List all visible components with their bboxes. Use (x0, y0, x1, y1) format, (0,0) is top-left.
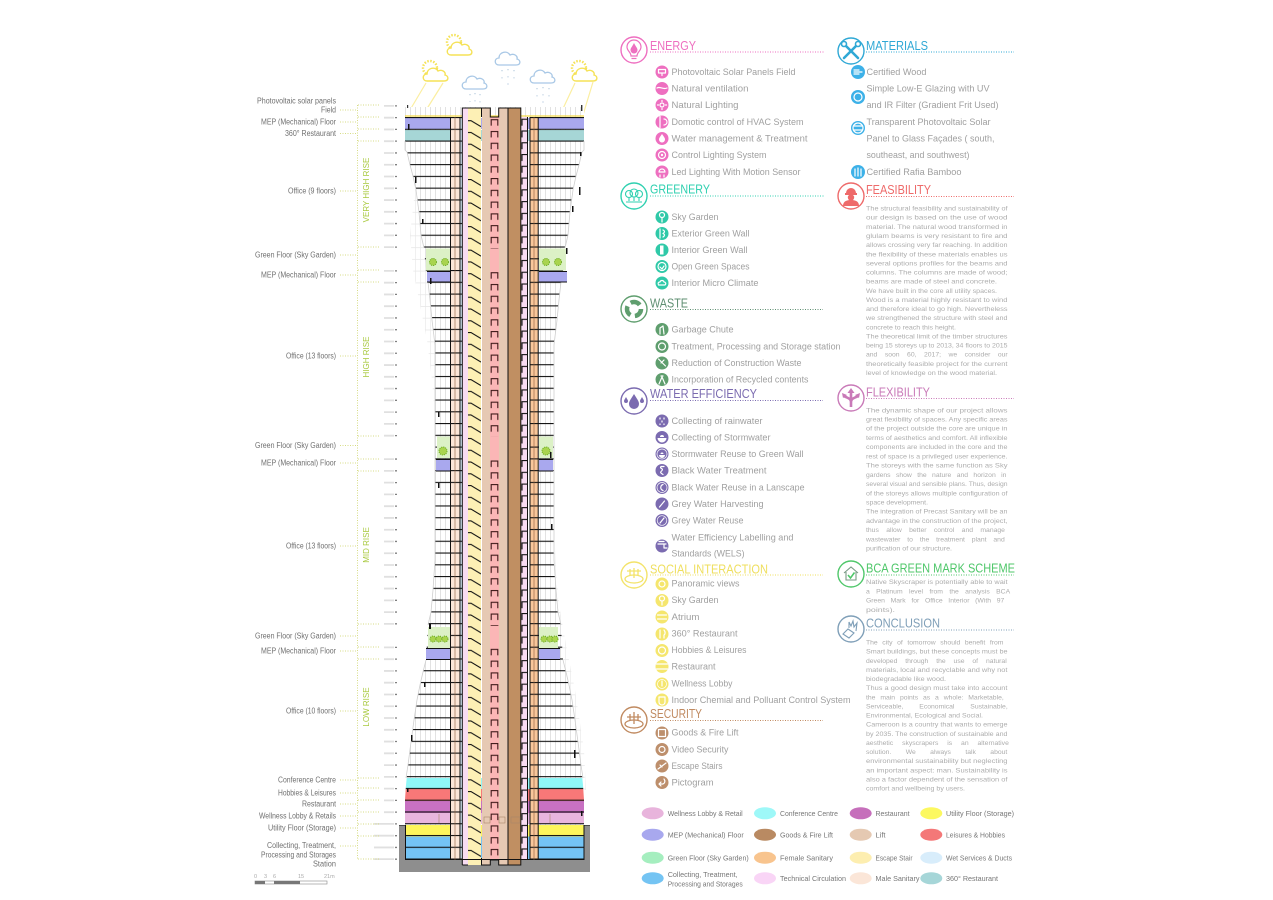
heading: greenery: GREENERY (650, 182, 711, 196)
text: flexibility paragraph: components are included in the core and the (866, 444, 1008, 451)
item: sky garden: Sky Garden (672, 212, 718, 222)
item: black water reuse (656, 481, 804, 494)
core outlines (406, 108, 584, 865)
item: goods and fire lift (656, 726, 739, 740)
item: panoramic views (656, 578, 740, 590)
text: flexibility paragraph: The dynamic shape of our project allows (866, 407, 1008, 414)
text: height zones: VERY HIGH RISE (362, 158, 371, 222)
text: feasibility paragraph: level of knowledge on the wood material. (866, 370, 997, 377)
legend: technical circulation (754, 872, 846, 884)
legend: MEP floor (642, 829, 744, 841)
text: conclusion paragraph: Cameroon is a country that wants to emerge (866, 722, 1008, 729)
legend: wellness lobby and retail: Wellness Lobby & Retail (668, 809, 743, 818)
icon: sun and cloud top (447, 35, 472, 55)
text: feasibility paragraph: allows crossing very far reaching. In addition (866, 242, 1008, 249)
text: flexibility paragraph: The integration of Precast Sanitary will be an (866, 509, 1008, 516)
legend: escape stair: Escape Stair (876, 853, 913, 862)
scale bar: 15 (298, 874, 304, 880)
item: low-e glazing: and IR Filter (Gradient Frit Used) (866, 100, 998, 110)
panel: greenery (621, 182, 824, 290)
item: rafia bamboo: Certified Rafia Bamboo (866, 167, 962, 177)
icon: sun rays left (407, 83, 443, 115)
text: feasibility paragraph: The structural feasibility and sustainability of (866, 206, 1008, 213)
item: stormwater reuse (656, 448, 804, 460)
item: grey water harvesting: Grey Water Harvesting (672, 499, 764, 509)
item: sky garden social (656, 594, 718, 607)
heading: water efficiency: WATER EFFICIENCY (650, 387, 758, 401)
text: conclusion paragraph: solution. We always talk about (866, 749, 1007, 756)
text: flexibility paragraph: several visual and sensible plans. Thus, design (866, 481, 1008, 488)
item: sky garden social: Sky Garden (672, 595, 718, 605)
roof solar field (405, 105, 584, 117)
text: feasibility paragraph: columns. The columns are made of wood; (866, 270, 1008, 276)
chart: building section (399, 105, 590, 872)
panel: energy (621, 37, 824, 178)
item: water efficiency labelling (656, 532, 794, 558)
item: collecting stormwater: Collecting of Stormwater (672, 432, 770, 442)
text: feasibility paragraph (865, 206, 1008, 377)
text: height zones (362, 158, 371, 727)
icon: water drops (621, 388, 647, 414)
item: interior green wall (656, 244, 748, 256)
item: rafia bamboo (851, 165, 962, 179)
text: height zones: LOW RISE (362, 687, 371, 727)
item: black water treatment: Black Water Treatment (672, 466, 767, 476)
legend: green floor (642, 852, 749, 864)
level dotted leaders (340, 105, 380, 859)
text: feasibility paragraph: several options profiles for the beams and (866, 260, 1008, 267)
item: stormwater reuse: Stormwater Reuse to Green Wall (672, 449, 804, 459)
sky gardens (426, 248, 566, 648)
legend: collecting and treatment: Collecting, Treatment, (668, 870, 738, 879)
item: led lighting: Led Lighting With Motion Sensor (672, 167, 800, 177)
item: hobbies and leisures (656, 644, 747, 657)
item: restaurant (656, 660, 716, 673)
text: feasibility paragraph: and soon 60, 2017; we consider our (866, 352, 1008, 359)
icon: rain cloud centre (495, 52, 520, 88)
legend: leisures and hobbies (920, 829, 1005, 841)
icon: sun and cloud right (572, 61, 597, 81)
item: natural ventilation: Natural ventilation (672, 84, 748, 94)
item: reduction of construction waste: Reduction of Construction Waste (672, 358, 802, 368)
text: flexibility paragraph: advantage in the construction of the project, (866, 518, 1008, 525)
item: photovoltaic facades: Panel to Glass Façades ( south, (866, 134, 994, 144)
legend: wet services and ducts: Wet Services & Ducts (946, 853, 1012, 862)
item: collecting rainwater (656, 414, 762, 428)
text: flexibility paragraph: purification of our structure. (866, 546, 952, 553)
text: BCA paragraph: Native Skyscraper is potentially able to wait (866, 579, 1008, 586)
item: collecting rainwater: Collecting of rainwater (672, 416, 762, 426)
item: certified wood: Certified Wood (866, 67, 926, 77)
panel: security (621, 707, 823, 789)
item: photovoltaic facades (851, 117, 994, 160)
icon: sun and cloud left (423, 61, 448, 81)
legend: collecting and treatment (642, 870, 743, 888)
item: photovoltaic facades: southeast, and southwest) (866, 150, 970, 160)
item: indoor chemical control: Indoor Chemial and Polluant Control System (672, 695, 850, 705)
heading: conclusion: CONCLUSION (866, 617, 940, 631)
text: feasibility paragraph: The theoretical limit of the timber structures (866, 333, 1008, 340)
text: conclusion paragraph: Thus a good design must take into account (866, 685, 1008, 692)
text: floor labels: Green Floor (Sky Garden) (255, 632, 336, 640)
text: height zones: HIGH RISE (362, 337, 371, 377)
legend: restaurant: Restaurant (876, 809, 910, 818)
legend: male sanitary (850, 872, 920, 884)
legend: lift (850, 829, 886, 841)
heading: flexibility: FLEXIBILITY (866, 386, 931, 400)
text: floor labels: Field (321, 106, 336, 114)
heading: security: SECURITY (650, 707, 703, 721)
panel: conclusion (838, 616, 1014, 793)
legend: collecting and treatment: Processing and Storages (668, 880, 743, 888)
text: floor labels: Utility Floor (Storage) (268, 824, 336, 832)
item: hobbies and leisures: Hobbies & Leisures (672, 645, 747, 655)
text: floor labels: Collecting, Treatment, (267, 841, 336, 850)
heading: materials: MATERIALS (866, 39, 928, 53)
text: flexibility paragraph: of the project outside the core are unique in (866, 426, 1008, 433)
legend: leisures and hobbies: Leisures & Hobbies (946, 830, 1005, 839)
legend: MEP floor: MEP (Mechanical) Floor (668, 830, 744, 839)
text: conclusion paragraph: aesthetic skyscrapers is an alternative (866, 740, 1009, 747)
item: water efficiency labelling: Water Efficiency Labelling and (672, 532, 794, 542)
legend: 360 restaurant (920, 872, 998, 884)
icon: social figures (621, 562, 647, 588)
sanitary column (490, 117, 499, 860)
item: water efficiency labelling: Standards (WELS) (672, 548, 744, 558)
legend: female sanitary: Female Sanitary (780, 853, 833, 862)
heading: BCA green mark scheme: BCA GREEN MARK SCHEME (866, 562, 1015, 576)
ground floor doors (439, 814, 550, 823)
legend: male sanitary: Male Sanitary (876, 874, 920, 883)
icon: house with check (838, 561, 864, 587)
item: garbage chute: Garbage Chute (672, 324, 734, 334)
item: natural lighting (656, 98, 738, 112)
legend: female sanitary (754, 852, 833, 864)
floor end markers (407, 124, 582, 816)
item: pictogram (656, 776, 714, 789)
legend: wet services and ducts (920, 852, 1012, 864)
item: restaurant: Restaurant (672, 662, 716, 672)
goods and fire lift (508, 108, 521, 865)
icon: recycle (621, 296, 647, 322)
item: black water reuse: Black Water Reuse in a Lanscape (672, 482, 804, 492)
item: collecting stormwater (656, 431, 770, 444)
icon: security figures (621, 707, 647, 733)
tower silhouette edge (405, 141, 584, 778)
item: black water treatment (656, 464, 767, 477)
item: interior micro climate (656, 276, 758, 290)
item: domotic control (656, 116, 804, 128)
text: feasibility paragraph: material. The natural wood transformed in (866, 224, 1008, 231)
text: conclusion paragraph: Smart buildings, but these concepts must be (866, 649, 1008, 656)
scale bar: 3 (264, 874, 267, 880)
text: flexibility paragraph: of the storeys allows multiple configuration of (866, 490, 1008, 497)
heading: social interaction: SOCIAL INTERACTION (650, 562, 768, 576)
legend (642, 807, 1014, 888)
text: floor labels: Wellness Lobby & Retails (259, 812, 336, 820)
text: conclusion paragraph: biodegradable like wood. (866, 676, 946, 683)
text: floor labels: Conference Centre (278, 776, 336, 784)
item: exterior green wall (656, 227, 750, 240)
text: flexibility paragraph: gardens show the nature and horizon in (866, 472, 1007, 479)
elevation markers (384, 105, 396, 860)
item: photovoltaic solar panels: Photovoltaic Solar Panels Field (672, 67, 796, 77)
item: video security (656, 743, 729, 756)
item: natural ventilation (656, 82, 748, 95)
text: BCA paragraph (866, 579, 1011, 614)
heading: energy: ENERGY (650, 39, 697, 53)
text: conclusion paragraph: an important aspect: man. Sustainability is (866, 767, 1008, 774)
item: photovoltaic facades: Transparent Photovoltaic Solar (866, 117, 990, 127)
text: flexibility paragraph (865, 407, 1008, 553)
text: feasibility paragraph: glulam beams is very resistant to fire and (866, 233, 1008, 240)
twisted ghost floors, upper left and lower right (410, 190, 586, 790)
item: interior micro climate: Interior Micro Climate (672, 278, 758, 288)
legend: conference centre (754, 807, 838, 819)
item: recycled contents (656, 373, 809, 386)
item: garbage chute (656, 323, 734, 336)
legend: goods and fire lift: Goods & Fire Lift (780, 830, 833, 839)
item: control lighting: Control Lighting System (672, 150, 766, 160)
text: floor labels: Restaurant (302, 800, 337, 808)
icon: branching arrows (838, 385, 864, 411)
text: conclusion paragraph: developed through the use of natural (866, 658, 1007, 665)
text: floor labels: Office (13 floors) (286, 352, 336, 360)
text: conclusion paragraph: environmental sustainability but neglecting (866, 758, 1008, 765)
item: low-e glazing (851, 84, 998, 110)
text: feasibility paragraph: theoretically feasible project for the current (866, 361, 1008, 368)
icon: hands (838, 616, 864, 642)
right technical shaft (521, 117, 528, 860)
text: floor labels: Office (10 floors) (286, 706, 336, 716)
text: flexibility paragraph: great flexibility of spaces. Any specific areas (866, 416, 1008, 424)
scale bar: 6 (273, 874, 276, 880)
legend: green floor: Green Floor (Sky Garden) (668, 853, 749, 862)
text: feasibility paragraph: being 15 storeys up to 2013, 34 floors to 2015 (866, 343, 1008, 350)
service core (406, 108, 584, 865)
item: escape stairs: Escape Stairs (672, 761, 723, 771)
text: conclusion paragraph: Serviceable, Economical Sustainable, (866, 704, 1008, 710)
text: flexibility paragraph: terms of aesthetics and comfort. All inflexible (866, 435, 1008, 442)
item: water management (656, 132, 808, 145)
legend: lift: Lift (876, 830, 886, 839)
item: certified wood (851, 65, 926, 79)
item: open green spaces: Open Green Spaces (672, 262, 750, 272)
item: exterior green wall: Exterior Green Wall (672, 228, 750, 238)
text: feasibility paragraph: our design is based on the use of wood (866, 215, 1008, 222)
text: floor labels: MEP (Mechanical) Floor (261, 118, 336, 126)
item: grey water harvesting (656, 498, 764, 510)
text: floor labels: MEP (Mechanical) Floor (261, 458, 336, 468)
text: height zones: MID RISE (362, 527, 371, 563)
item: interior green wall: Interior Green Wall (672, 245, 748, 255)
item: panoramic views: Panoramic views (672, 578, 740, 588)
text: floor labels (255, 96, 337, 868)
text: floor labels: MEP (Mechanical) Floor (261, 646, 336, 656)
icon: crossed tools (838, 38, 864, 64)
text: BCA paragraph: Green Mark for Office Interior (With 97 (866, 598, 1004, 605)
icon: greenery trees (621, 183, 647, 209)
legend: utility floor (920, 807, 1014, 819)
text: feasibility paragraph: We have built in the core all utility spaces. (866, 288, 997, 295)
icon: sun rays right (560, 82, 593, 115)
text: BCA paragraph: points). (866, 607, 895, 614)
legend: utility floor: Utility Floor (Storage) (946, 809, 1014, 818)
scale bar: 21m (324, 874, 335, 880)
heading: feasibility: FEASIBILITY (866, 183, 932, 197)
text: floor labels: Green Floor (Sky Garden) (255, 441, 336, 450)
scale bar (254, 874, 335, 884)
text: floor labels: 360° Restaurant (285, 129, 337, 138)
text: conclusion paragraph: also a factor dependent of the sensation of (866, 776, 1008, 784)
panel: water efficiency (621, 387, 823, 558)
item: escape stairs (656, 760, 723, 772)
text: conclusion paragraph: The city of tomorrow should benefit from (866, 640, 1004, 647)
text: floor labels: Hobbies & Leisures (278, 788, 336, 798)
item: goods and fire lift: Goods & Fire Lift (672, 728, 739, 738)
text: flexibility paragraph: The storeys with the same function as Sky (866, 463, 1008, 470)
text: conclusion paragraph: Environmental, Ecological and Social. (866, 713, 983, 720)
item: 360 restaurant (656, 628, 738, 640)
text: feasibility paragraph: and therefore ideal to go high. Nevertheless (866, 306, 1008, 313)
legend: wellness lobby and retail (642, 807, 743, 819)
item: video security: Video Security (672, 744, 729, 754)
item: pictogram: Pictogram (672, 778, 714, 788)
panel: social interaction (621, 562, 850, 706)
heading: waste: WASTE (650, 296, 688, 310)
panel: flexibility (838, 385, 1014, 553)
text: BCA paragraph: a Platinum level from the analysis BCA (866, 588, 1011, 595)
item: control lighting (656, 148, 766, 162)
text: conclusion paragraph: the main points as a whole: Marketable, (866, 694, 1004, 701)
text: floor labels: Station (313, 860, 336, 868)
scale bar: 0 (254, 874, 257, 880)
text: feasibility paragraph: we strengthened the structure with steel and (865, 315, 1008, 322)
legend: goods and fire lift (754, 829, 833, 841)
panel: waste (621, 296, 840, 386)
tower floors and programme bands (400, 117, 590, 860)
item: natural lighting: Natural Lighting (672, 100, 738, 110)
item: atrium (656, 610, 700, 624)
text: flexibility paragraph: rest of space is a privileged user experience. (866, 453, 1008, 460)
garden trees (430, 258, 562, 642)
item: wellness lobby (656, 678, 733, 690)
text: feasibility paragraph: the flexibility of these materials enables us (866, 251, 1008, 258)
item: wellness lobby: Wellness Lobby (672, 678, 733, 688)
item: sky garden (656, 210, 718, 224)
text: feasibility paragraph: concrete to reach this height. (866, 324, 956, 331)
item: grey water reuse: Grey Water Reuse (672, 516, 744, 526)
thin sanitary lines (455, 117, 534, 860)
item: open green spaces (656, 260, 750, 273)
item: photovoltaic solar panels (656, 66, 796, 78)
legend: technical circulation: Technical Circulation (780, 874, 846, 883)
panel: BCA green mark scheme (838, 561, 1015, 614)
item: treatment and storage station (656, 340, 840, 353)
item: water management: Water management & Treatment (672, 134, 808, 144)
text: conclusion paragraph: by 2035. The construction of sustainable and (866, 731, 1008, 738)
text: flexibility paragraph: space development. (866, 500, 928, 506)
text: floor labels: MEP (Mechanical) Floor (261, 270, 336, 280)
text: flexibility paragraph: thus allow better control and manage (866, 527, 1005, 534)
technical circulation and escape stair (462, 108, 481, 865)
legend: escape stair (850, 852, 913, 864)
panel: materials (838, 38, 1014, 179)
text: floor labels: Office (9 floors) (288, 186, 336, 196)
text: feasibility paragraph: Wood is a material highly resistant to wind (866, 297, 1008, 304)
legend: restaurant (850, 807, 910, 819)
icon: rain cloud right (530, 70, 555, 108)
text: conclusion paragraph (866, 640, 1009, 793)
icon: engineer (838, 183, 864, 209)
MEP floors (426, 271, 567, 660)
legend: 360 restaurant: 360° Restaurant (946, 874, 998, 883)
item: grey water reuse (656, 514, 744, 527)
text: flexibility paragraph: wastewater to the treatment plant and (865, 536, 1005, 543)
item: low-e glazing: Simple Low-E Glazing with UV (866, 84, 990, 94)
text: floor labels: Photovoltaic solar panels (257, 96, 336, 106)
item: reduction of construction waste (656, 356, 802, 370)
foundation block (399, 825, 590, 872)
text: floor labels: Office (13 floors) (286, 542, 336, 550)
item: atrium: Atrium (672, 612, 700, 622)
text: floor labels: Green Floor (Sky Garden) (255, 250, 336, 260)
text: feasibility paragraph: beams are made of steel and concrete. (866, 279, 997, 286)
icon: energy bulb (621, 37, 647, 63)
item: recycled contents: Incorporation of Recycled contents (672, 374, 809, 384)
text: floor labels: Processing and Storages (261, 850, 336, 860)
item: domotic control: Domotic control of HVAC System (672, 117, 804, 127)
icon: rain cloud left (462, 76, 487, 112)
legend: conference centre: Conference Centre (780, 809, 838, 818)
text: conclusion paragraph: materials, local and recyclable and why not (866, 667, 1008, 674)
panel: feasibility (838, 183, 1014, 377)
text: conclusion paragraph: comfort and wellbeing by users. (866, 786, 965, 793)
weather icons above the tower (407, 35, 597, 115)
item: led lighting (656, 166, 800, 178)
lifts (482, 108, 508, 865)
item: treatment and storage station: Treatment, Processing and Storage station (672, 342, 840, 352)
item: 360 restaurant: 360° Restaurant (672, 628, 738, 638)
